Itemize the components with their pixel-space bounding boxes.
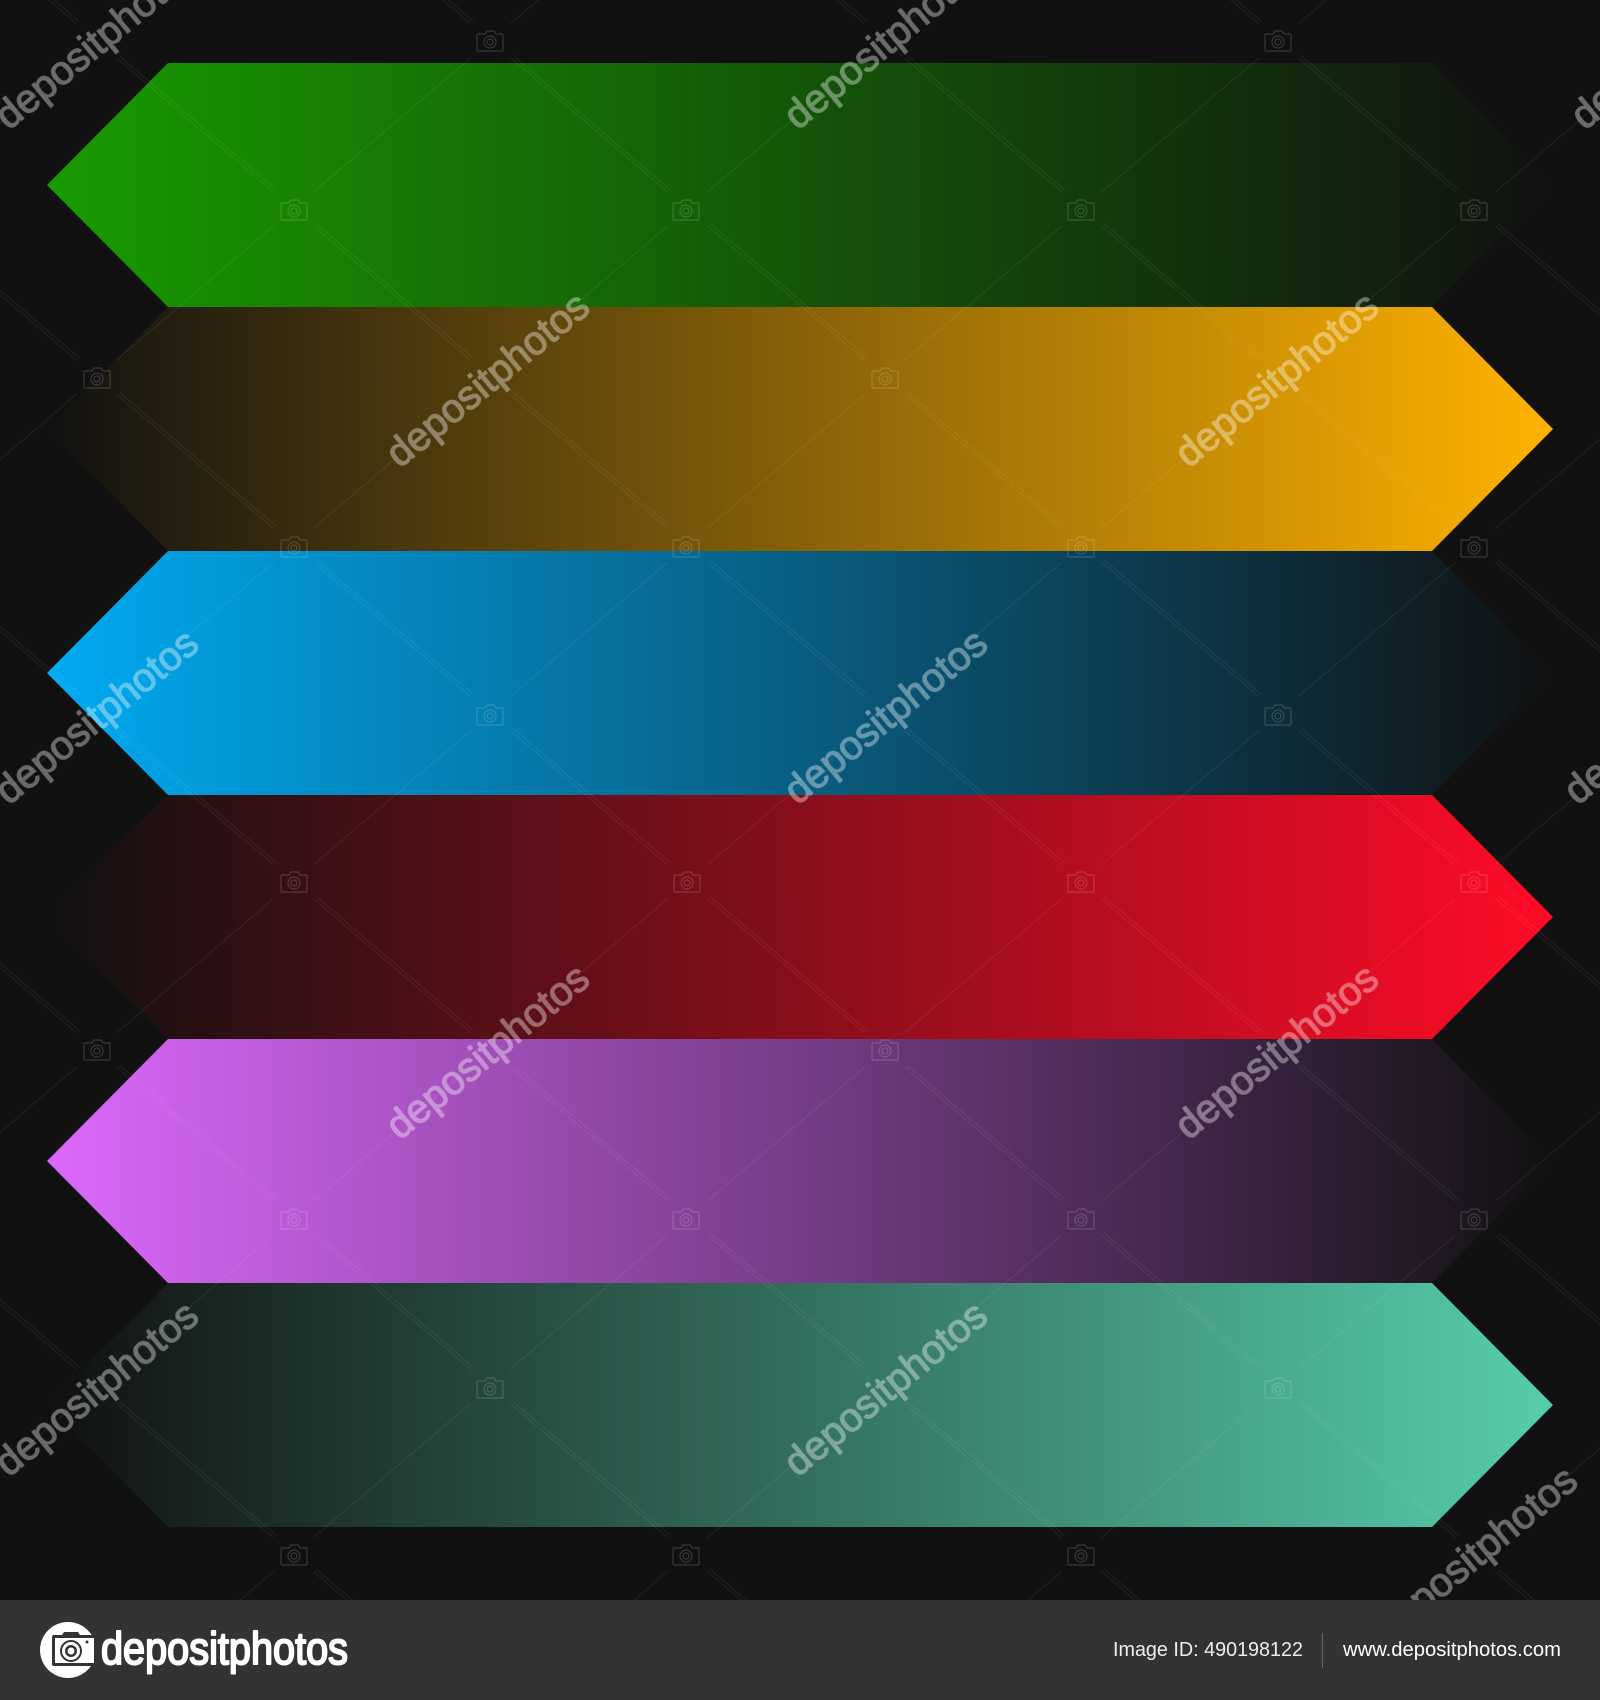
purple banner arrow [47,1039,1553,1283]
diagonal depositphotos watermarks: depositphotos [776,1293,996,1485]
red banner arrow [47,795,1553,1039]
watermark camera icons [84,31,1487,1565]
diagonal depositphotos watermarks: depositphotos [1167,956,1387,1148]
image id: Image ID: 490198122 [1113,1639,1303,1661]
blue banner arrow [47,551,1553,795]
diagonal depositphotos watermarks: depositphotos [776,621,996,813]
amber banner arrow [47,307,1553,551]
green banner arrow [47,63,1553,307]
teal banner arrow [47,1283,1553,1527]
footer divider [1322,1633,1323,1668]
diagonal depositphotos watermarks: depositphotos [1366,1458,1586,1650]
footer bar [0,1600,1600,1700]
icon: depositphotos camera logo [40,1622,96,1678]
diagonal depositphotos watermarks: depositphotos [378,956,598,1148]
diagonal depositphotos watermarks: depositphotos [378,284,598,476]
website url: www.depositphotos.com [1342,1639,1561,1661]
diagonal depositphotos watermarks: depositphotos [1167,284,1387,476]
logo wordmark: depositphotos [101,1623,348,1674]
